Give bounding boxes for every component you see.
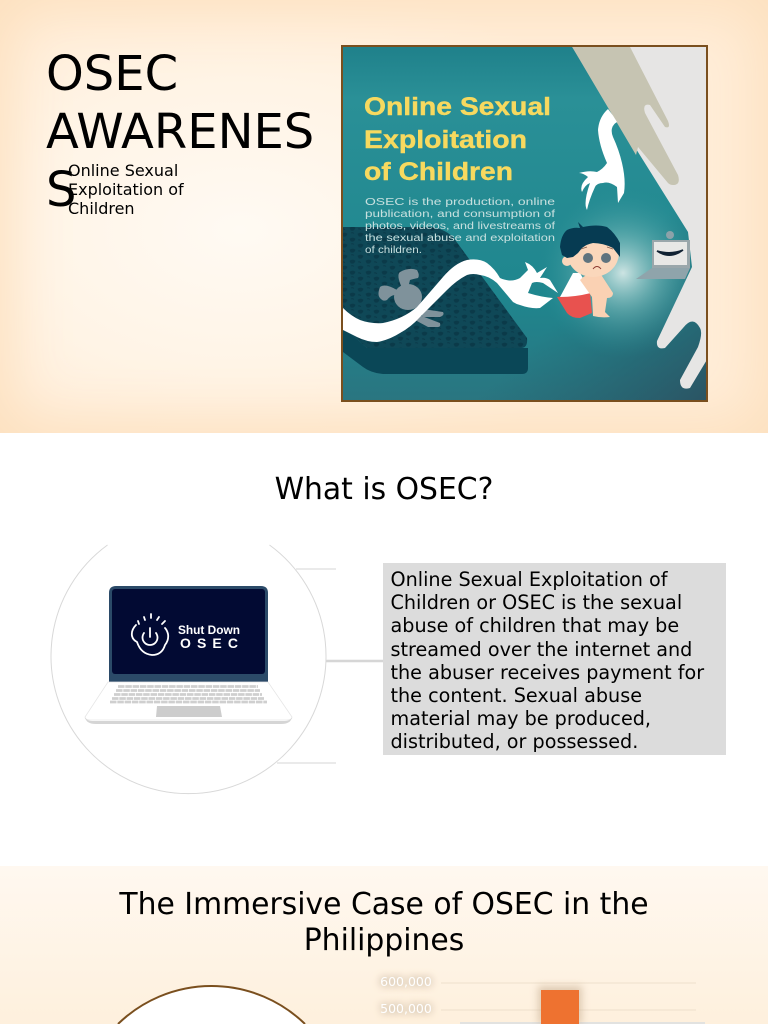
- text block: OSEC definition: material may be produced,: [390, 707, 651, 730]
- text block: OSEC definition: the abuser receives payment for: [390, 661, 704, 684]
- text: poster heading: Exploitation: [364, 126, 527, 154]
- text block: OSEC definition: the content. Sexual abuse: [390, 684, 642, 707]
- icon: grey rabbit toy: [378, 269, 444, 327]
- text: poster description: the sexual abuse and exploitation: [365, 233, 555, 244]
- beige arm shadow: [571, 45, 679, 185]
- text block: OSEC definition: Children or OSEC is the sexual: [390, 591, 682, 614]
- text: poster description: of children.: [365, 245, 422, 256]
- heading: What is OSEC?: What is OSEC?: [275, 472, 493, 507]
- white hand from above: [579, 109, 625, 210]
- heading: The Immersive Case of OSEC in the Philippines: [119, 887, 649, 958]
- frame: [342, 46, 707, 401]
- text: poster heading: of Children: [364, 158, 513, 186]
- text: poster heading: [364, 93, 551, 186]
- panel: immersive case section: [0, 866, 768, 1024]
- title: AWARENES: [46, 104, 314, 160]
- circle photo frame: [117, 985, 306, 1024]
- keyboard: [110, 686, 267, 702]
- text block: OSEC definition: Online Sexual Exploitation of: [390, 568, 668, 591]
- background: [341, 45, 708, 402]
- mattress: [343, 227, 528, 374]
- icon: laptop: Shut Down: [178, 625, 240, 637]
- long white ghost arm: [343, 259, 558, 342]
- text block: OSEC definition: streamed over the internet and: [390, 638, 692, 661]
- axis label 500,000: 500,000: [380, 1001, 432, 1016]
- logo: [132, 614, 168, 655]
- title: OSEC: [46, 46, 178, 102]
- text block: OSEC definition: [383, 563, 726, 755]
- child figure: [557, 222, 620, 318]
- axis label 600,000: 600,000: [380, 974, 432, 989]
- text: poster description: [365, 197, 556, 256]
- text: poster description: photos, videos, and livestreams of: [365, 221, 555, 232]
- icon: laptop: [85, 586, 292, 724]
- light wall with drips: [571, 45, 708, 389]
- text block: OSEC definition: abuse of children that may be: [390, 614, 679, 637]
- icon: laptop: OSEC: [180, 635, 238, 651]
- bar chart: [441, 982, 705, 1024]
- text: poster description: publication, and consumption of: [365, 209, 555, 220]
- text: poster description: OSEC is the production, online: [365, 197, 556, 208]
- panel: hero section: [0, 0, 768, 433]
- poster: online sexual exploitation of children: [341, 45, 708, 402]
- text block: OSEC definition: distributed, or possessed.: [390, 730, 638, 753]
- laptop illustration in circle: [50, 544, 383, 794]
- subtitle: Online Sexual Exploitation of Children: [68, 161, 184, 218]
- connector lines: [277, 569, 384, 763]
- icon: laptop with grin: [636, 231, 690, 279]
- text: poster heading: Online Sexual: [364, 93, 551, 121]
- title: S: [46, 162, 76, 218]
- circle outline: [51, 545, 326, 794]
- title: [46, 46, 314, 218]
- trackpad: [156, 706, 222, 717]
